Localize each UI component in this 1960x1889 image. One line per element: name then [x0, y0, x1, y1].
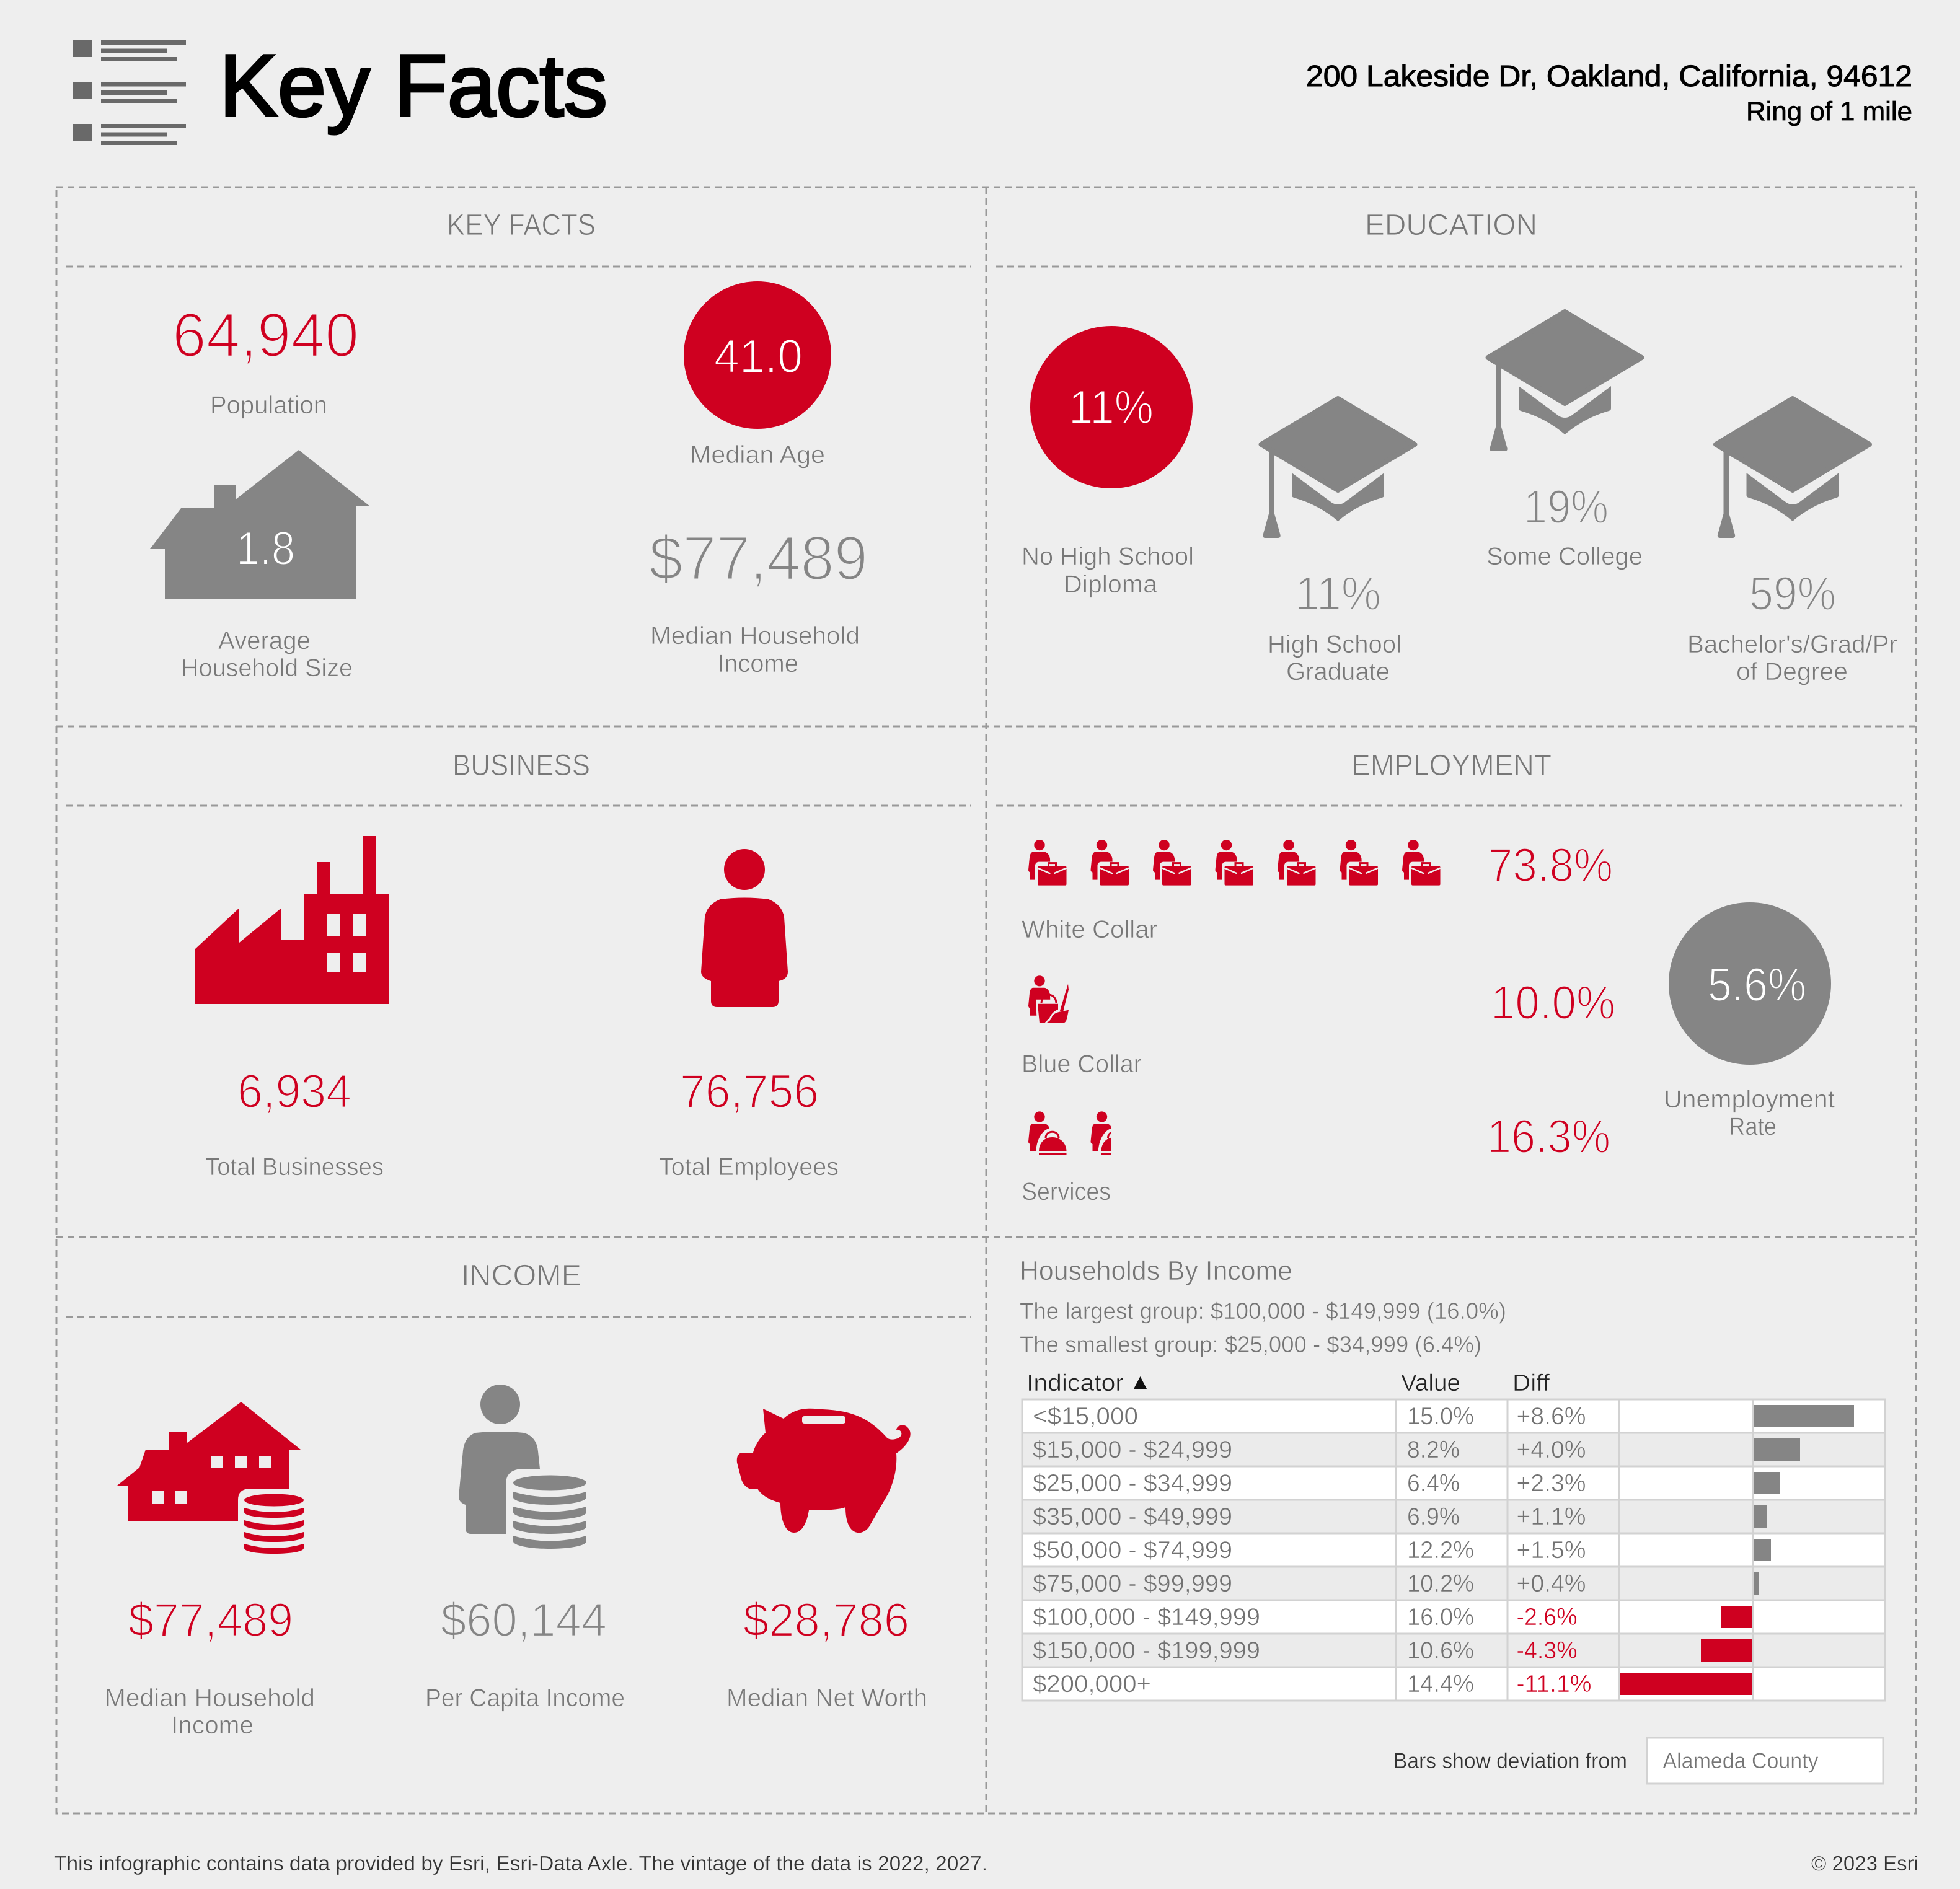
table header: Diff	[1512, 1370, 1550, 1396]
stat: total businesses: 6,934	[237, 1065, 351, 1118]
heading: employment: EMPLOYMENT	[1351, 749, 1552, 782]
stat: population: 64,940	[172, 301, 359, 370]
stat: average household size: Household Size	[181, 654, 353, 682]
row: services	[1022, 1111, 1610, 1205]
footer: copyright: © 2023 Esri	[1811, 1852, 1918, 1875]
table rows text: $100,000 - $149,999	[1033, 1604, 1260, 1631]
stat: median household income: Income	[171, 1712, 254, 1739]
panel: employment	[1022, 749, 1835, 1205]
table: income deviation	[1022, 1399, 1885, 1701]
table rows text: +1.5%	[1516, 1537, 1586, 1564]
stat: median age	[684, 281, 831, 469]
panel: key facts	[150, 209, 868, 682]
stat: total employees	[659, 849, 839, 1181]
table header: Value	[1401, 1370, 1460, 1396]
table rows text: $200,000+	[1033, 1671, 1151, 1697]
stat: bachelor's or higher degree: 59%	[1749, 568, 1836, 620]
header icon: list	[73, 40, 186, 145]
stat: high school graduate	[1261, 398, 1415, 685]
stat: median age: Median Age	[690, 441, 825, 469]
stat: high school graduate: Graduate	[1286, 658, 1390, 685]
deviation selector: Bars show deviation from	[1393, 1749, 1627, 1773]
heading: households by income: Households By Income	[1020, 1256, 1292, 1286]
table rows text: $35,000 - $49,999	[1033, 1504, 1232, 1530]
stat: per capita income: Per Capita Income	[425, 1684, 625, 1712]
table rows text: -4.3%	[1516, 1637, 1577, 1664]
stat: total businesses	[195, 836, 389, 1181]
stat: total businesses: Total Businesses	[205, 1153, 384, 1181]
table rows text: 6.4%	[1407, 1470, 1460, 1497]
stat: bachelor's or higher degree: of Degree	[1736, 658, 1848, 685]
table header	[1026, 1370, 1550, 1396]
heading: business: BUSINESS	[452, 749, 590, 782]
table rows text: 14.4%	[1407, 1671, 1474, 1697]
table rows text: +2.3%	[1516, 1470, 1586, 1497]
table rows text: $150,000 - $199,999	[1033, 1637, 1260, 1664]
stat: no high school diploma	[1022, 326, 1194, 598]
table rows text: +1.1%	[1516, 1504, 1586, 1530]
stat: median net worth: Median Net Worth	[726, 1684, 927, 1712]
stat: some college: 19%	[1524, 481, 1609, 534]
table rows text: $25,000 - $34,999	[1033, 1470, 1232, 1497]
row: blue collar	[1022, 975, 1615, 1078]
panel: households by income	[1020, 1256, 1885, 1784]
negative deviation bars	[1620, 1606, 1752, 1695]
table rows text: 8.2%	[1407, 1437, 1460, 1463]
stat: median household income	[649, 524, 868, 677]
ring description: Ring of 1 mile	[1746, 97, 1912, 126]
row: blue collar: Blue Collar	[1022, 1050, 1142, 1078]
table rows text: <$15,000	[1033, 1403, 1138, 1430]
heading: education: EDUCATION	[1365, 209, 1537, 242]
table rows text: $50,000 - $74,999	[1033, 1537, 1232, 1564]
stat: total employees: Total Employees	[659, 1153, 839, 1181]
smallest group note: The smallest group: $25,000 - $34,999 (6.4%)	[1020, 1332, 1481, 1357]
stat: median household income: $77,489	[649, 524, 868, 593]
table rows text: $15,000 - $24,999	[1033, 1437, 1232, 1463]
stat: unemployment rate: Rate	[1729, 1113, 1777, 1140]
stat: median age: 41.0	[714, 330, 803, 383]
stat: some college	[1486, 312, 1643, 570]
deviation selector	[1393, 1738, 1883, 1784]
table rows text: -2.6%	[1516, 1604, 1577, 1631]
row: white collar	[1022, 839, 1613, 943]
stat: average household size: 1.8	[236, 522, 295, 575]
table rows text: $75,000 - $99,999	[1033, 1570, 1232, 1597]
table rows text: 6.9%	[1407, 1504, 1460, 1530]
table rows text: 10.2%	[1407, 1570, 1474, 1597]
table rows text: 15.0%	[1407, 1403, 1474, 1430]
stat: bachelor's or higher degree	[1687, 398, 1897, 685]
row: services: Services	[1022, 1178, 1111, 1205]
address: 200 Lakeside Dr, Oakland, California, 94612	[1306, 60, 1912, 93]
heading: income: INCOME	[461, 1259, 581, 1292]
table rows text	[1033, 1403, 1592, 1697]
panel: income	[105, 1259, 927, 1739]
stat: unemployment rate: 5.6%	[1708, 959, 1806, 1011]
table rows text: 12.2%	[1407, 1537, 1474, 1564]
row: blue collar: 10.0%	[1491, 977, 1615, 1029]
stat: high school graduate: High School	[1268, 631, 1402, 658]
stat: median net worth: $28,786	[743, 1594, 909, 1647]
stat: some college: Some College	[1486, 543, 1643, 570]
stat: median net worth	[726, 1409, 927, 1712]
stat: no high school diploma: Diploma	[1064, 571, 1158, 598]
largest group note: The largest group: $100,000 - $149,999 (16.0%)	[1020, 1298, 1506, 1324]
stat: median household income: Median Household	[105, 1684, 315, 1712]
panel: business	[195, 749, 839, 1181]
stat: median household income: $77,489	[128, 1594, 293, 1647]
stat: no high school diploma: No High School	[1022, 543, 1194, 570]
stat: bachelor's or higher degree: Bachelor's/Grad/Pr	[1687, 631, 1897, 658]
stat: average household size	[150, 450, 370, 682]
title: Key Facts	[219, 37, 607, 135]
row: services: 16.3%	[1487, 1111, 1610, 1163]
row: white collar: White Collar	[1022, 916, 1157, 943]
table rows text: 16.0%	[1407, 1604, 1474, 1631]
heading: key facts: KEY FACTS	[447, 209, 596, 242]
table header: Indicator	[1026, 1370, 1124, 1396]
positive deviation bars	[1754, 1405, 1854, 1595]
stat: average household size: Average	[218, 627, 311, 654]
table rows text: 10.6%	[1407, 1637, 1474, 1664]
table rows text: +0.4%	[1516, 1570, 1586, 1597]
stat: median household income: Income	[717, 650, 798, 677]
table rows text: +4.0%	[1516, 1437, 1586, 1463]
stat: unemployment rate: Unemployment	[1664, 1086, 1835, 1113]
row: white collar: 73.8%	[1488, 839, 1613, 892]
stat: total employees: 76,756	[680, 1065, 819, 1118]
stat: per capita income: $60,144	[441, 1594, 607, 1647]
footer: source note: This infographic contains data provided by Esri, Esri-Data Axle. The vintage of the data is 2022, 2027.	[54, 1852, 987, 1875]
stat: no high school diploma: 11%	[1069, 381, 1154, 434]
panel: education	[1022, 209, 1897, 685]
stat: unemployment rate	[1664, 902, 1835, 1140]
deviation selector: Alameda County	[1662, 1749, 1819, 1773]
stat: median household income	[105, 1402, 315, 1739]
stat: population: Population	[210, 392, 327, 419]
stat: population	[172, 301, 359, 419]
stat: per capita income	[425, 1385, 625, 1712]
stat: high school graduate: 11%	[1295, 568, 1381, 620]
table rows text: +8.6%	[1516, 1403, 1586, 1430]
stat: median household income: Median Household	[650, 622, 860, 649]
table rows text: -11.1%	[1516, 1671, 1592, 1697]
